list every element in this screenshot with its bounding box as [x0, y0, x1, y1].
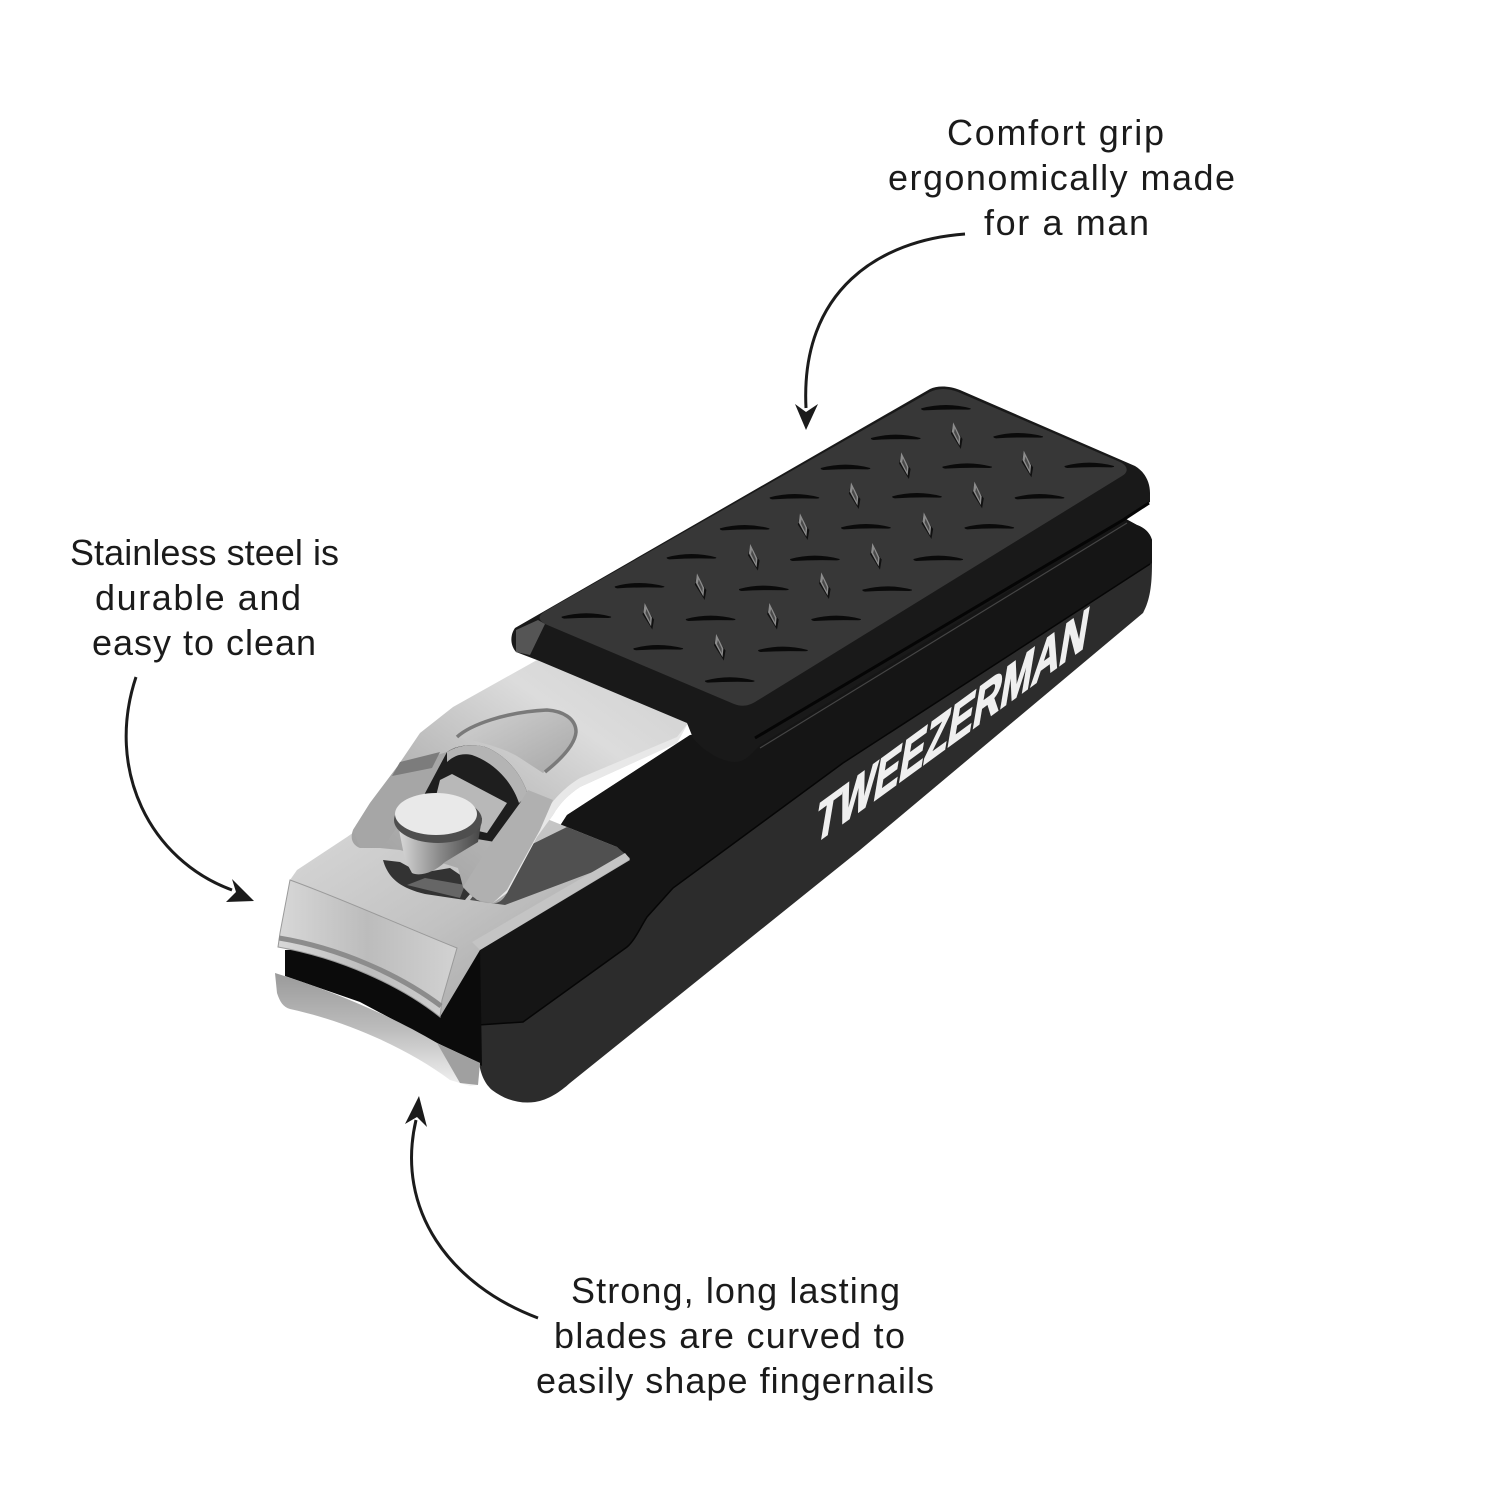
front blade face: [278, 880, 457, 1017]
blade lip highlight: [279, 938, 441, 1006]
callout: blades text: [536, 1270, 934, 1401]
lower blade: [275, 945, 482, 1086]
lever: [352, 660, 688, 903]
callout: blades text: easily shape fingernails: [536, 1360, 934, 1401]
callout: comfort grip text: ergonomically made: [888, 157, 1235, 198]
callout: stainless steel text: durable and: [95, 577, 301, 618]
callout: blades text: Strong, long lasting: [571, 1270, 900, 1311]
callout: blades text: blades are curved to: [554, 1315, 905, 1356]
arrow: comfort grip: [795, 234, 965, 430]
callout: stainless steel text: easy to clean: [92, 622, 316, 663]
lower jaw plate: [290, 800, 630, 1017]
grip pad: [511, 386, 1150, 762]
clipper body: [477, 519, 1152, 1102]
arrow: blades: [405, 1096, 538, 1318]
callout: stainless steel text: [70, 532, 339, 663]
callout: comfort grip text: [888, 112, 1235, 243]
arrow: stainless steel: [126, 677, 254, 902]
brand wordmark: TWEEZERMAN: [811, 593, 1094, 858]
callout: comfort grip text: for a man: [984, 202, 1149, 243]
tread pattern: [562, 405, 1114, 683]
callout: stainless steel text: Stainless steel is: [70, 532, 339, 573]
rivet: [394, 793, 482, 874]
product: nail clipper: [275, 386, 1152, 1102]
callout: comfort grip text: Comfort grip: [947, 112, 1164, 153]
